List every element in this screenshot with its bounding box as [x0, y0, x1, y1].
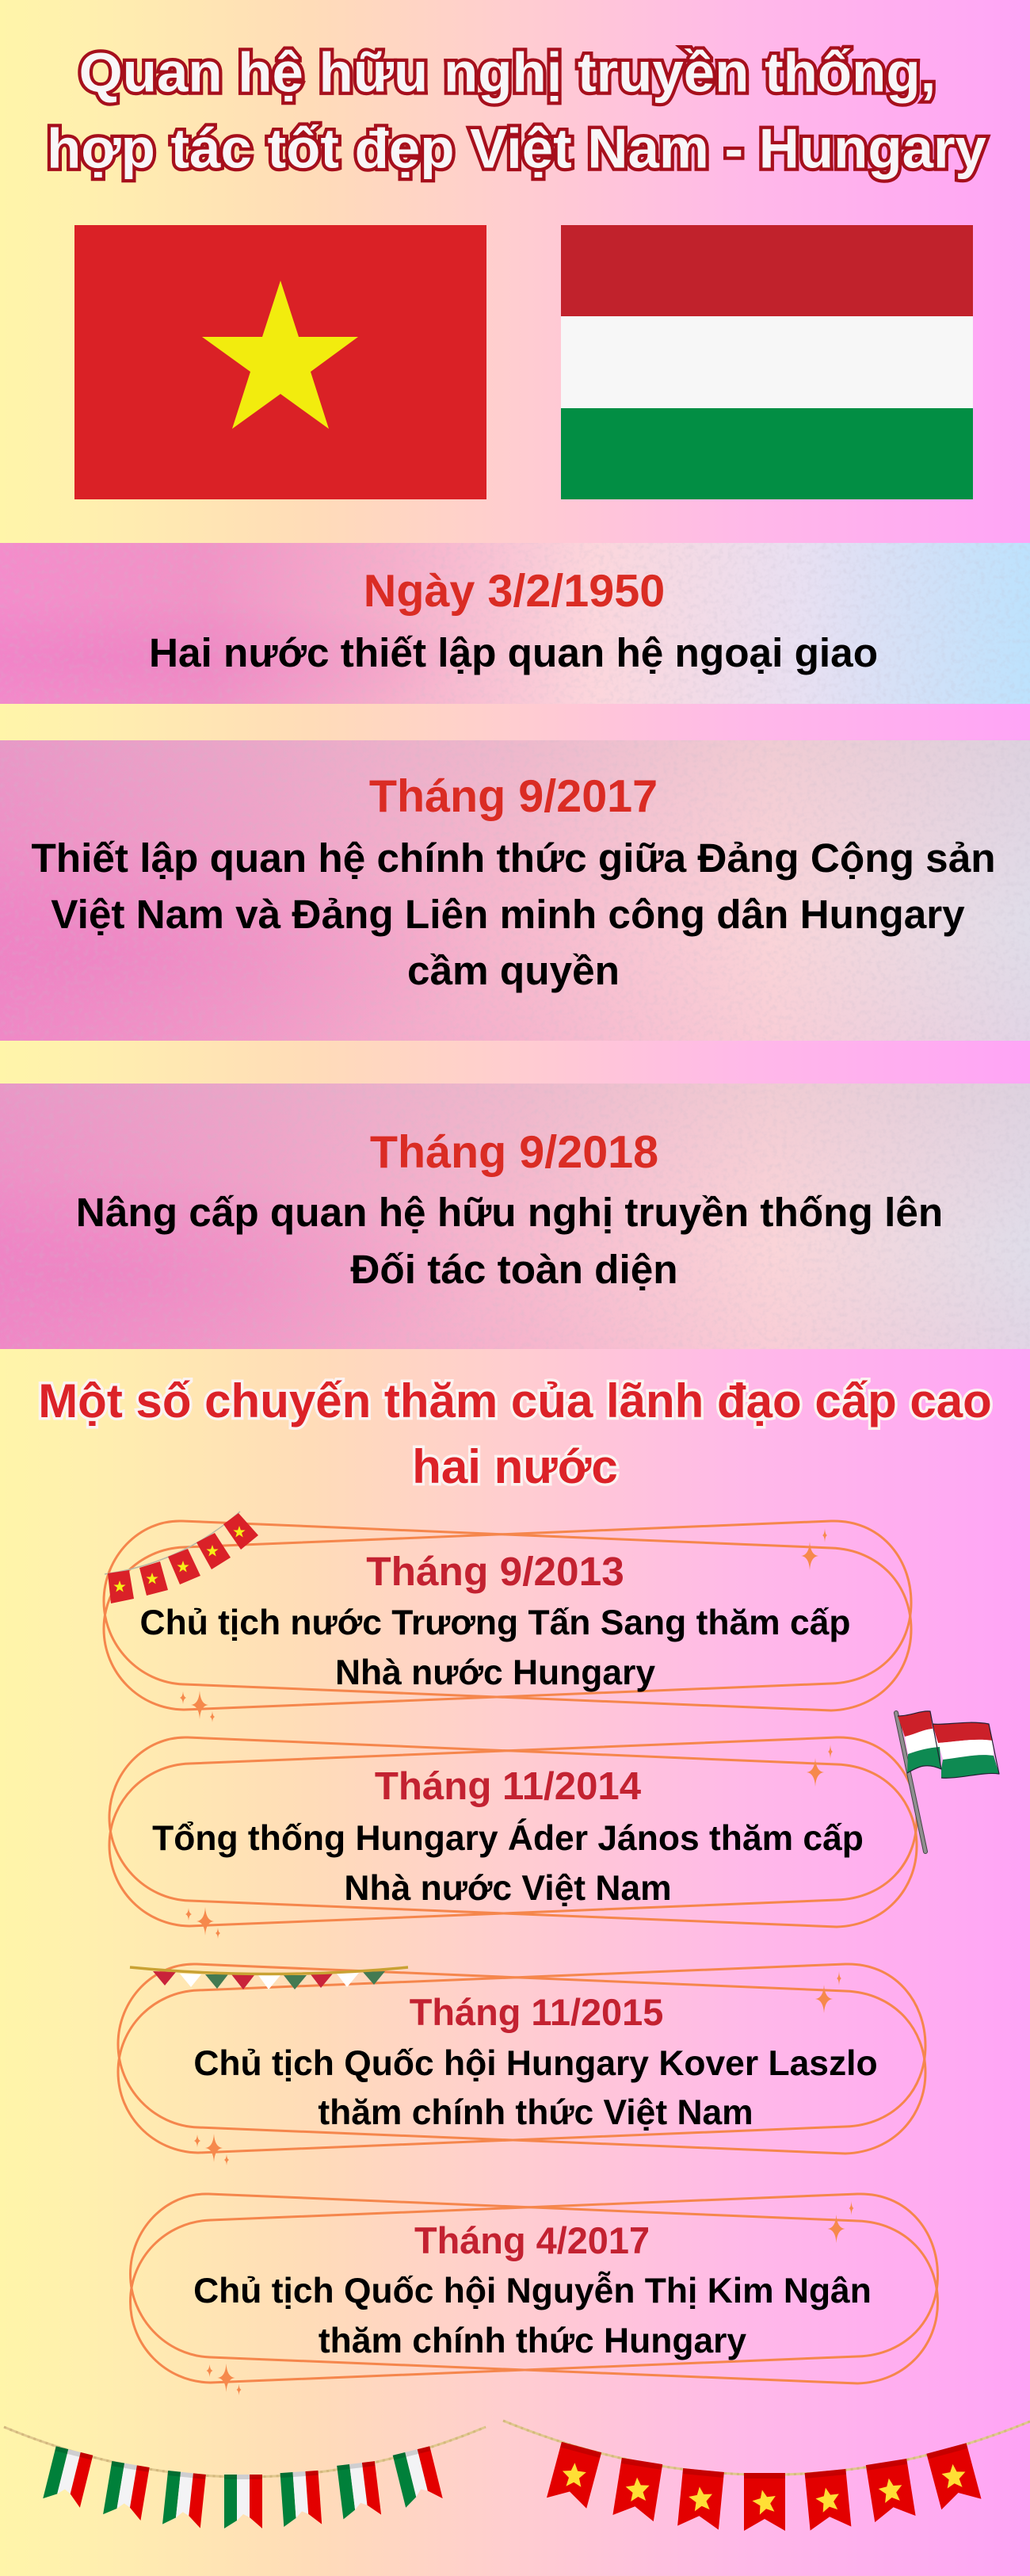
- description: 11/2014: [152, 1818, 864, 1908]
- description: 11/2015: thăm chính thức Việt Nam: [318, 2093, 753, 2132]
- description: 11/2015: Chủ tịch Quốc hội Hungary Kover Laszlo: [193, 2044, 878, 2083]
- icon: waving Hungary flag on pole: [896, 1711, 999, 1852]
- description: 3/2/1950: Hai nước thiết lập quan hệ ngoại giao: [149, 630, 878, 675]
- description: 9/2013: Chủ tịch nước Trương Tấn Sang thăm cấp: [140, 1603, 850, 1642]
- description: 9/2013: Nhà nước Hungary: [335, 1653, 655, 1692]
- title: [47, 41, 986, 181]
- description: 11/2014: Tổng thống Hungary Áder János thăm cấp: [152, 1818, 864, 1858]
- date: 4/2017: Tháng 4/2017: [414, 2220, 650, 2261]
- date: 3/2/1950: Ngày 3/2/1950: [364, 566, 665, 617]
- description: 9/2013: [140, 1603, 850, 1692]
- description: 11/2015: [193, 2044, 878, 2132]
- flag: Hungary: [561, 225, 973, 499]
- date: 11/2015: Tháng 11/2015: [410, 1992, 663, 2033]
- visit card: 9/2013: [104, 1521, 911, 1722]
- description: 4/2017: thăm chính thức Hungary: [319, 2322, 746, 2360]
- visit card: 11/2015: [118, 1964, 925, 2165]
- description: 9/2018: Nâng cấp quan hệ hữu nghị truyền thống lên: [76, 1190, 943, 1235]
- description: 9/2017: cầm quyền: [407, 948, 620, 993]
- title: Quan hệ hữu nghị truyền thống,: [79, 41, 936, 105]
- visit card: 11/2014: [109, 1737, 917, 1939]
- date: 9/2013: Tháng 9/2013: [366, 1548, 624, 1594]
- description: 9/2018: [76, 1190, 943, 1292]
- panel: 9/2018: [0, 1084, 1030, 1349]
- date: 9/2017: Tháng 9/2017: [369, 771, 658, 822]
- description: 9/2018: Đối tác toàn diện: [350, 1247, 678, 1292]
- description: 9/2017: Thiết lập quan hệ chính thức giữa Đảng Cộng sản: [31, 835, 996, 881]
- panel: 9/2017: [0, 740, 1030, 1041]
- section heading: [38, 1374, 992, 1493]
- date: 11/2014: Tháng 11/2014: [375, 1764, 642, 1808]
- title: hợp tác tốt đẹp Việt Nam - Hungary: [47, 117, 986, 181]
- bunting: Hungary-coloured pennants (left): [4, 2427, 486, 2528]
- description: 9/2017: Việt Nam và Đảng Liên minh công dân Hungary: [51, 892, 965, 937]
- section heading: hai nước: [412, 1440, 618, 1493]
- date: 9/2018: Tháng 9/2018: [370, 1127, 658, 1178]
- icon: Vietnam bunting on card: [105, 1512, 258, 1603]
- description: 9/2017: [31, 835, 996, 993]
- description: 4/2017: Chủ tịch Quốc hội Nguyễn Thị Kim Ngân: [193, 2271, 872, 2310]
- icon: triangular bunting on card: [130, 1967, 408, 1989]
- panel: 3/2/1950: [0, 543, 1030, 704]
- visit card: 4/2017: [130, 2194, 938, 2395]
- description: 4/2017: [193, 2271, 872, 2360]
- description: 11/2014: Nhà nước Việt Nam: [344, 1869, 672, 1908]
- flag: Vietnam: [74, 225, 486, 499]
- section heading: Một số chuyến thăm của lãnh đạo cấp cao: [38, 1374, 992, 1428]
- bunting: Vietnam pennants (right): [503, 2421, 1030, 2531]
